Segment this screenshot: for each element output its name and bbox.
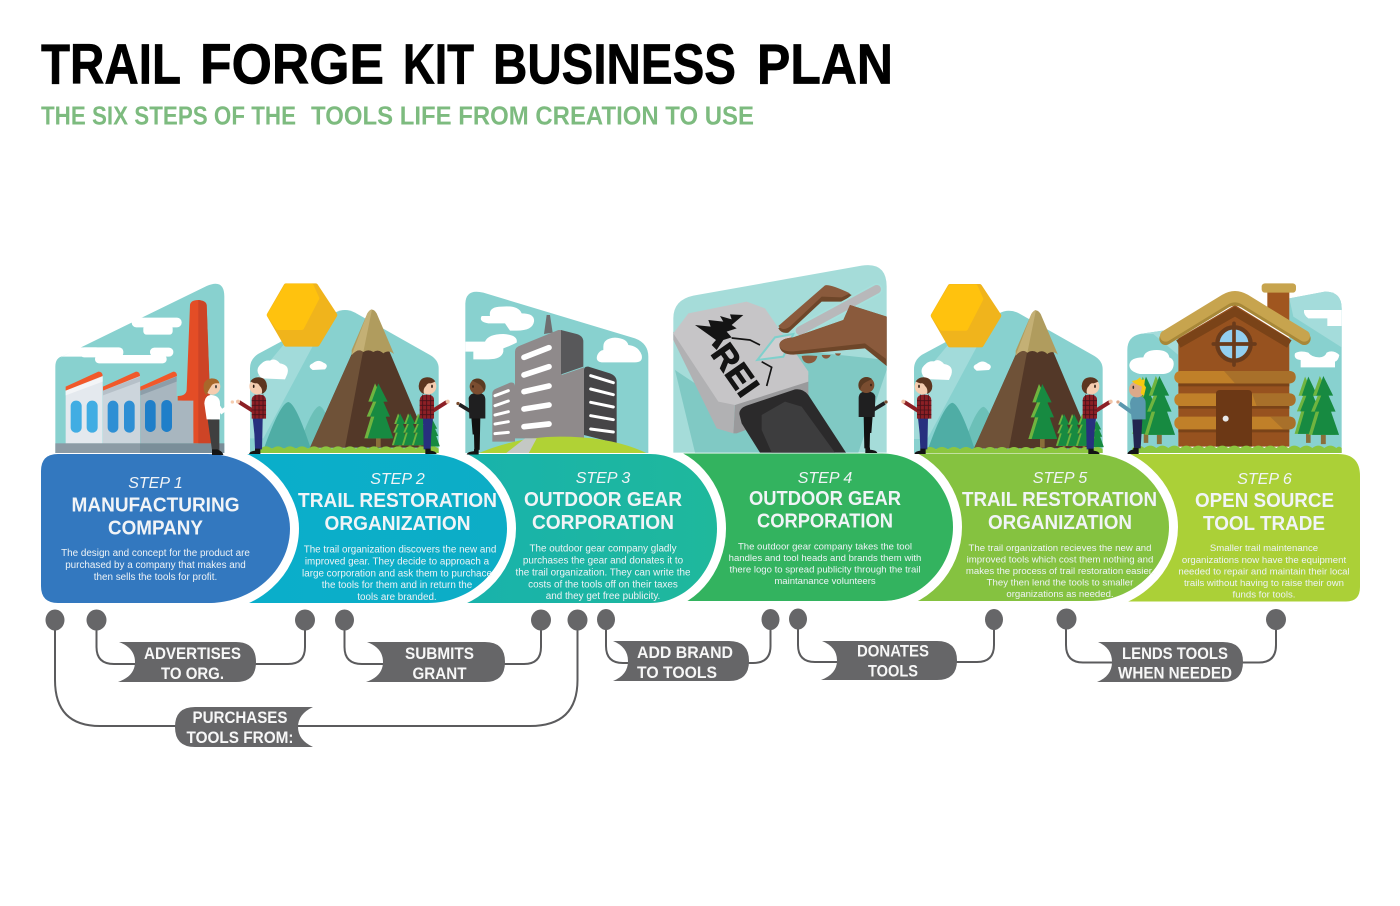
- title: [41, 32, 893, 96]
- text: step 2: improved gear. They decide to approach a: [305, 556, 490, 568]
- text: step 1: then sells the tools for profit.: [94, 572, 217, 583]
- text: step 1: [61, 475, 250, 583]
- subtitle: [41, 100, 754, 130]
- text: step 5: organizations as needed.: [1006, 589, 1114, 600]
- text: step 4: handles and tool heads and brands them with: [729, 553, 921, 564]
- text: step 5: [962, 470, 1157, 600]
- connector: submits grant: SUBMITS: [405, 644, 474, 663]
- panel: step 1 manufacturing company: [41, 454, 290, 603]
- text: step 5: ORGANIZATION: [988, 511, 1132, 534]
- figure: company rep, step 4: [858, 377, 888, 453]
- text: step 3: CORPORATION: [532, 511, 674, 534]
- text: step 5: improved tools which cost them nothing and: [967, 554, 1153, 566]
- text: step 6: TOOL TRADE: [1203, 512, 1325, 535]
- text: step 6: trails without having to raise their own: [1184, 578, 1344, 589]
- illustration: office building scene for step 3: [465, 292, 648, 454]
- text: step 4: there logo to spread publicity through the trail: [729, 564, 921, 576]
- title: FORGE: [200, 32, 384, 96]
- panel: step 4 outdoor gear corporation: [660, 454, 953, 601]
- panel: step 3 outdoor gear corporation: [440, 454, 717, 603]
- figure: trail volunteer, step 5 right: [1082, 377, 1113, 454]
- connector: advertises to org: ADVERTISES: [144, 644, 241, 663]
- text: step 4: OUTDOOR GEAR: [749, 487, 901, 510]
- connector: submits grant: [335, 610, 551, 683]
- text: step 2: [298, 471, 497, 603]
- text: step 1: STEP 1: [128, 475, 183, 492]
- text: step 5: makes the process of trail restoration easier.: [966, 566, 1154, 577]
- logo: REI arrow mark: [695, 314, 743, 350]
- text: step 2: ORGANIZATION: [324, 512, 470, 535]
- connector: lends tools when needed: LENDS TOOLS: [1122, 644, 1228, 663]
- title: PLAN: [757, 32, 893, 96]
- text: step 3: STEP 3: [576, 470, 630, 487]
- connector: advertises to org: [86, 610, 315, 683]
- connector: donates tools: TOOLS: [868, 662, 918, 680]
- text: step 4: [729, 470, 921, 587]
- illustration: log cabin scene for step 6: [1127, 283, 1342, 455]
- title: TRAIL: [41, 32, 181, 96]
- panel: step 2 trail restoration organization: [240, 454, 507, 603]
- text: step 2: TRAIL RESTORATION: [298, 489, 497, 512]
- connector: add brand to tools: [597, 609, 780, 682]
- logo: REI lettering: REI: [703, 337, 766, 404]
- illustration: factory scene for step 1: [55, 284, 224, 453]
- text: step 6: [1178, 471, 1350, 600]
- illustration: mountain and sun scene for step 2: [250, 286, 440, 455]
- connector: purchases tools from: PURCHASES: [192, 708, 288, 727]
- figure: small organization volunteer, blond: [1116, 377, 1146, 454]
- subtitle: TOOLS LIFE FROM CREATION TO USE: [311, 100, 754, 130]
- text: step 1: purchased by a company that makes and: [65, 560, 246, 571]
- text: step 6: funds for tools.: [1233, 590, 1295, 600]
- text: step 2: the tools for them and in return the: [322, 580, 473, 591]
- connector: purchases tools from: [46, 610, 588, 747]
- text: step 4: STEP 4: [798, 470, 852, 487]
- connector: submits grant: GRANT: [412, 664, 467, 683]
- text: step 6: Smaller trail maintenance: [1210, 543, 1318, 554]
- text: step 4: The outdoor gear company takes the tool: [738, 542, 912, 552]
- text: step 1: COMPANY: [108, 516, 203, 540]
- text: step 6: needed to repair and maintain their local: [1178, 566, 1350, 578]
- figure: company rep, step 3: [456, 379, 486, 454]
- connector: add brand to tools: TO TOOLS: [637, 663, 717, 682]
- text: step 4: maintanance volunteers: [774, 576, 876, 587]
- figure: trail volunteer, step 5 left: [901, 377, 932, 454]
- text: step 3: OUTDOOR GEAR: [524, 488, 682, 511]
- text: step 5: STEP 5: [1033, 470, 1087, 487]
- text: step 3: purchases the gear and donates it to: [523, 556, 684, 566]
- text: step 3: [516, 470, 691, 602]
- connector: purchases tools from: TOOLS FROM:: [186, 728, 294, 747]
- connector: donates tools: [789, 608, 1003, 680]
- text: step 2: tools are branded.: [357, 592, 437, 603]
- illustration: mountain and sun scene for step 5: [914, 286, 1104, 456]
- panel: step 6 open source tool trade: [1110, 454, 1360, 602]
- connector: add brand to tools: ADD BRAND: [637, 643, 733, 662]
- text: step 1: MANUFACTURING: [72, 494, 240, 516]
- text: step 3: costs of the tools off on their taxes: [528, 580, 678, 590]
- figure: trail volunteer, step 2 left: [236, 377, 267, 454]
- text: step 6: organizations now have the equipment: [1182, 555, 1346, 566]
- title: BUSINESS: [493, 32, 736, 96]
- text: step 4: CORPORATION: [757, 510, 893, 532]
- figure: trail volunteer, step 2 right: [419, 377, 450, 454]
- text: step 6: STEP 6: [1237, 471, 1292, 488]
- connector: donates tools: DONATES: [857, 642, 929, 660]
- connector: advertises to org: TO ORG.: [161, 664, 224, 683]
- connector: lends tools when needed: [1056, 608, 1286, 682]
- illustration: REI branding stamp and hand for step 4: [673, 265, 887, 453]
- text: step 1: The design and concept for the product are: [61, 548, 250, 559]
- text: step 2: The trail organization discovers the new and: [304, 544, 496, 556]
- connector: lends tools when needed: WHEN NEEDED: [1118, 664, 1232, 682]
- text: step 5: TRAIL RESTORATION: [962, 488, 1157, 511]
- text: step 2: large corporation and ask them to purchace: [302, 568, 492, 580]
- text: step 2: STEP 2: [370, 471, 425, 488]
- text: step 3: The outdoor gear company gladly: [529, 544, 677, 554]
- text: step 3: the trail organization. They can write the: [516, 568, 691, 578]
- panel: step 5 trail restoration organization: [900, 454, 1169, 601]
- subtitle: THE SIX STEPS OF THE: [41, 100, 296, 130]
- text: step 6: OPEN SOURCE: [1195, 489, 1334, 512]
- text: step 5: The trail organization recieves the new and: [969, 543, 1151, 554]
- text: step 3: and they get free publicity.: [546, 591, 660, 602]
- figure: factory worker in white shirt: [204, 378, 234, 455]
- title: KIT: [403, 32, 474, 96]
- text: step 5: They then lend the tools to smaller: [987, 578, 1134, 588]
